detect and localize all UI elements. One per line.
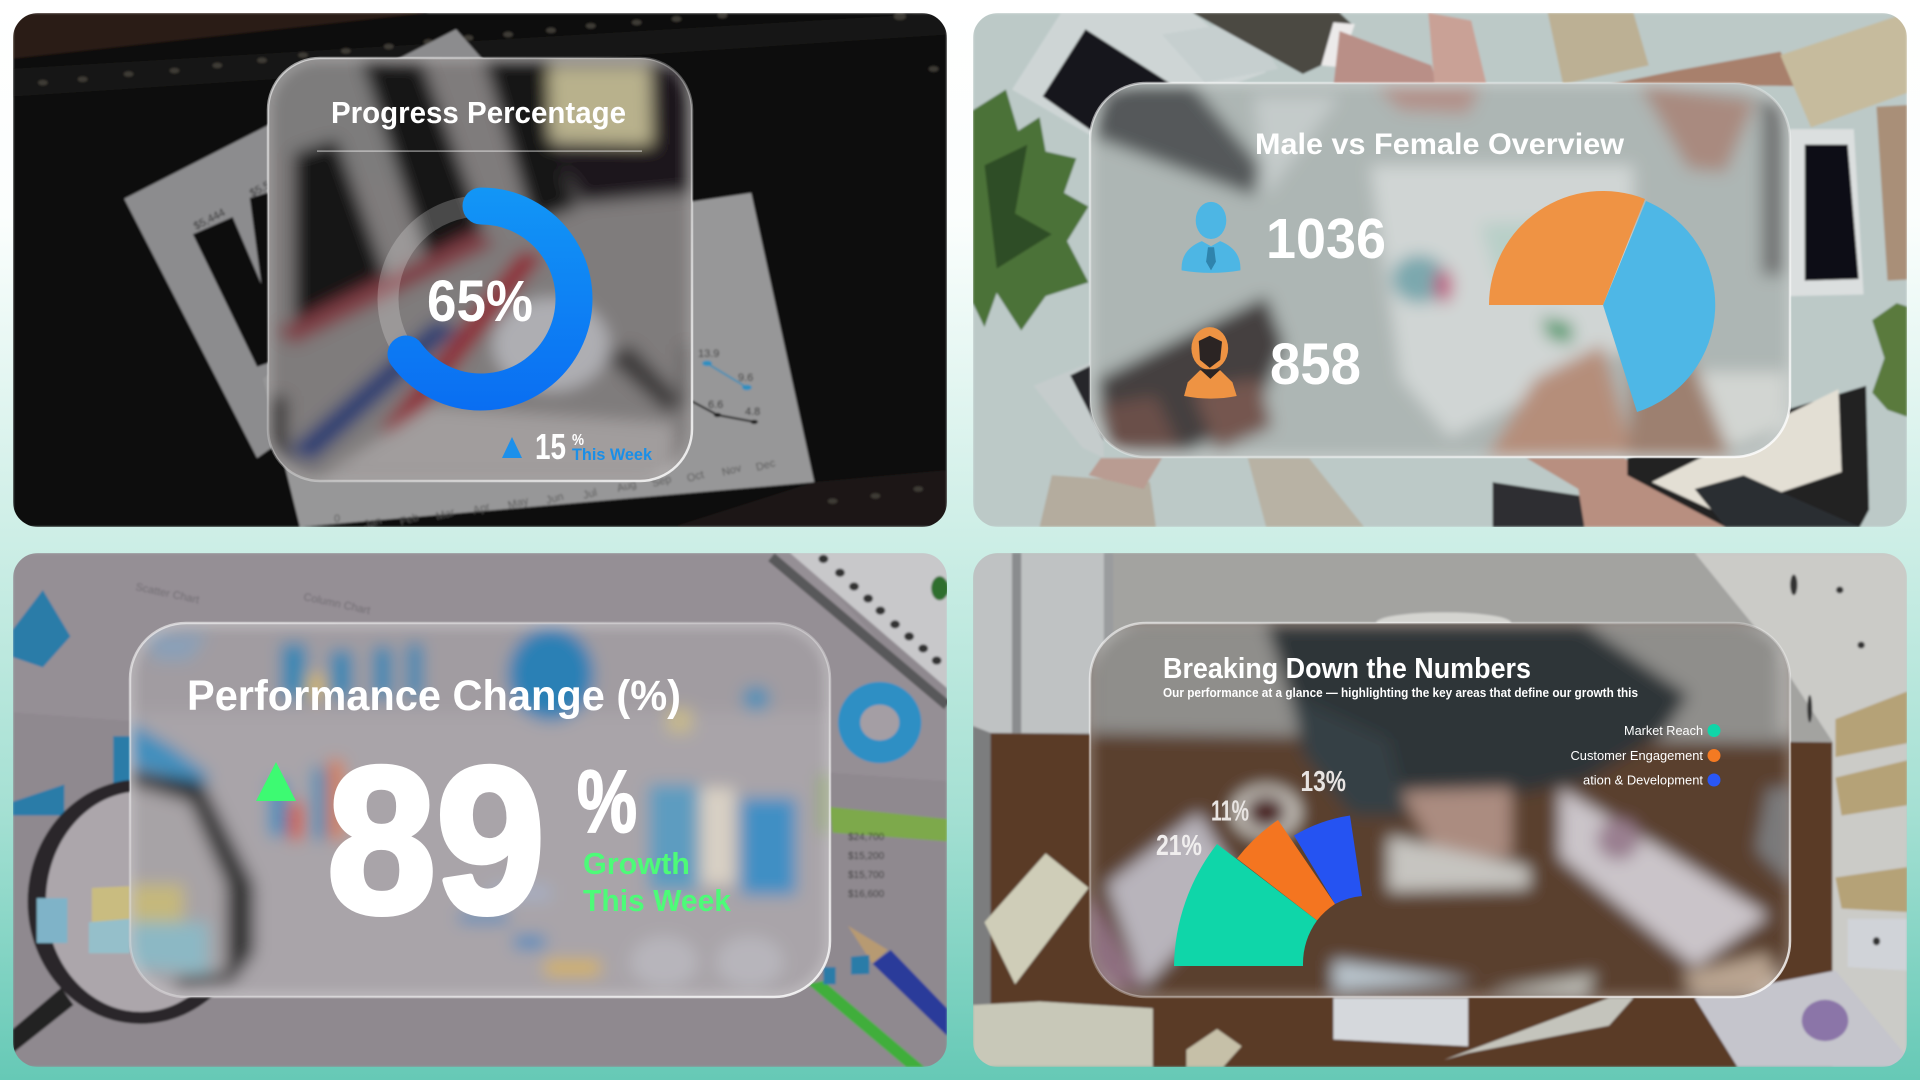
donut chart 65%: 65%: [427, 269, 533, 334]
photo: charts on dark trunk: Jul: [582, 487, 598, 502]
photo: charts on dark trunk: Apr: [472, 501, 492, 517]
big metric: 89 percent: 89: [327, 725, 545, 957]
heading: performance change: Performance Change (%): [187, 672, 681, 720]
heading: progress percentage: Progress Percentage: [331, 95, 626, 130]
pie chart: gender split: [1489, 191, 1715, 412]
label: growth this week: Growth: [583, 846, 690, 881]
glass card: breakdown: [1088, 622, 1792, 998]
photo: charts on dark trunk: Jan: [363, 515, 383, 531]
photo: charts on dark trunk: Nov: [721, 462, 743, 479]
heading: male vs female: Male vs Female Overview: [1255, 128, 1625, 161]
glass card: gender: [1088, 82, 1792, 458]
weekly change callout: %: [572, 432, 584, 449]
photo: charts on dark trunk: $5,444: [192, 207, 227, 233]
panel: performance change: [13, 553, 948, 1067]
legend: Market Reach: [1624, 723, 1703, 738]
divider line: [317, 150, 642, 152]
photo: man working at wooden desk: [973, 553, 1907, 1067]
photo: charts on dark trunk: Sep: [651, 473, 673, 490]
icon: up arrow: [256, 762, 296, 801]
legend: [1570, 723, 1720, 788]
female count: 858: [1270, 332, 1361, 397]
photo: charts on dark trunk: Jun: [545, 491, 565, 507]
panel: progress percentage: [13, 13, 947, 531]
donut chart 65%: [388, 206, 574, 392]
icon: male figure: [1182, 202, 1240, 273]
photo: charts on dark trunk: May: [507, 495, 530, 512]
panel: male vs female overview: [973, 13, 1907, 527]
photo: charts on dark trunk: Oct: [686, 469, 705, 485]
radial sector chart: 21%: [1156, 830, 1202, 862]
photo: charts on dark trunk: 9.6: [738, 372, 753, 384]
weekly change callout: 15: [535, 426, 566, 467]
photo: analytics printouts with magnifier: [13, 553, 948, 1067]
male count: 1036: [1266, 207, 1386, 271]
photo: charts on dark trunk: 0: [334, 513, 340, 525]
panel: breaking down the numbers: [973, 553, 1907, 1067]
weekly change callout: This Week: [572, 445, 653, 464]
heading: breaking down the numbers: Breaking Down the Numbers: [1163, 653, 1531, 685]
glass card: progress: [266, 56, 694, 482]
photo: charts on dark trunk: Dec: [755, 457, 777, 474]
photo: charts on dark trunk: Mar: [435, 506, 456, 523]
photo: charts on dark trunk: 6.6: [708, 399, 723, 411]
icon: female figure: [1184, 327, 1237, 399]
photo: analytics printouts with magnifier: $24,700: [848, 832, 885, 843]
photo: charts on dark trunk: 4.8: [745, 406, 760, 418]
photo: charts on dark trunk: $5,5: [248, 179, 272, 200]
glass card: performance: [128, 622, 832, 998]
legend: ation & Development: [1583, 772, 1703, 788]
subtitle: Our performance at a glance — highlighting the key areas that define our growth this: [1163, 686, 1638, 700]
label: growth this week: This Week: [583, 883, 732, 918]
label: growth this week: [583, 846, 732, 918]
big metric: 89 percent: %: [577, 752, 637, 851]
photo: charts on dark trunk: [13, 13, 947, 531]
legend: Customer Engagement: [1570, 748, 1703, 763]
photo: charts on dark trunk: 13.9: [698, 348, 719, 360]
photo: analytics printouts with magnifier: Column Chart: [302, 591, 371, 617]
photo: analytics printouts with magnifier: $15,700: [848, 870, 885, 881]
photo: team at table: [973, 13, 1907, 527]
photo: analytics printouts with magnifier: $16,600: [848, 889, 885, 900]
weekly change callout: [502, 426, 653, 467]
photo: charts on dark trunk: Feb: [399, 511, 420, 528]
photo: analytics printouts with magnifier: Scatter Chart: [134, 581, 200, 606]
radial sector chart: 11%: [1211, 796, 1249, 828]
photo: charts on dark trunk: Aug: [616, 478, 638, 495]
radial sector chart: [1156, 766, 1362, 966]
radial sector chart: 13%: [1300, 766, 1346, 798]
photo: analytics printouts with magnifier: $15,200: [848, 851, 885, 862]
